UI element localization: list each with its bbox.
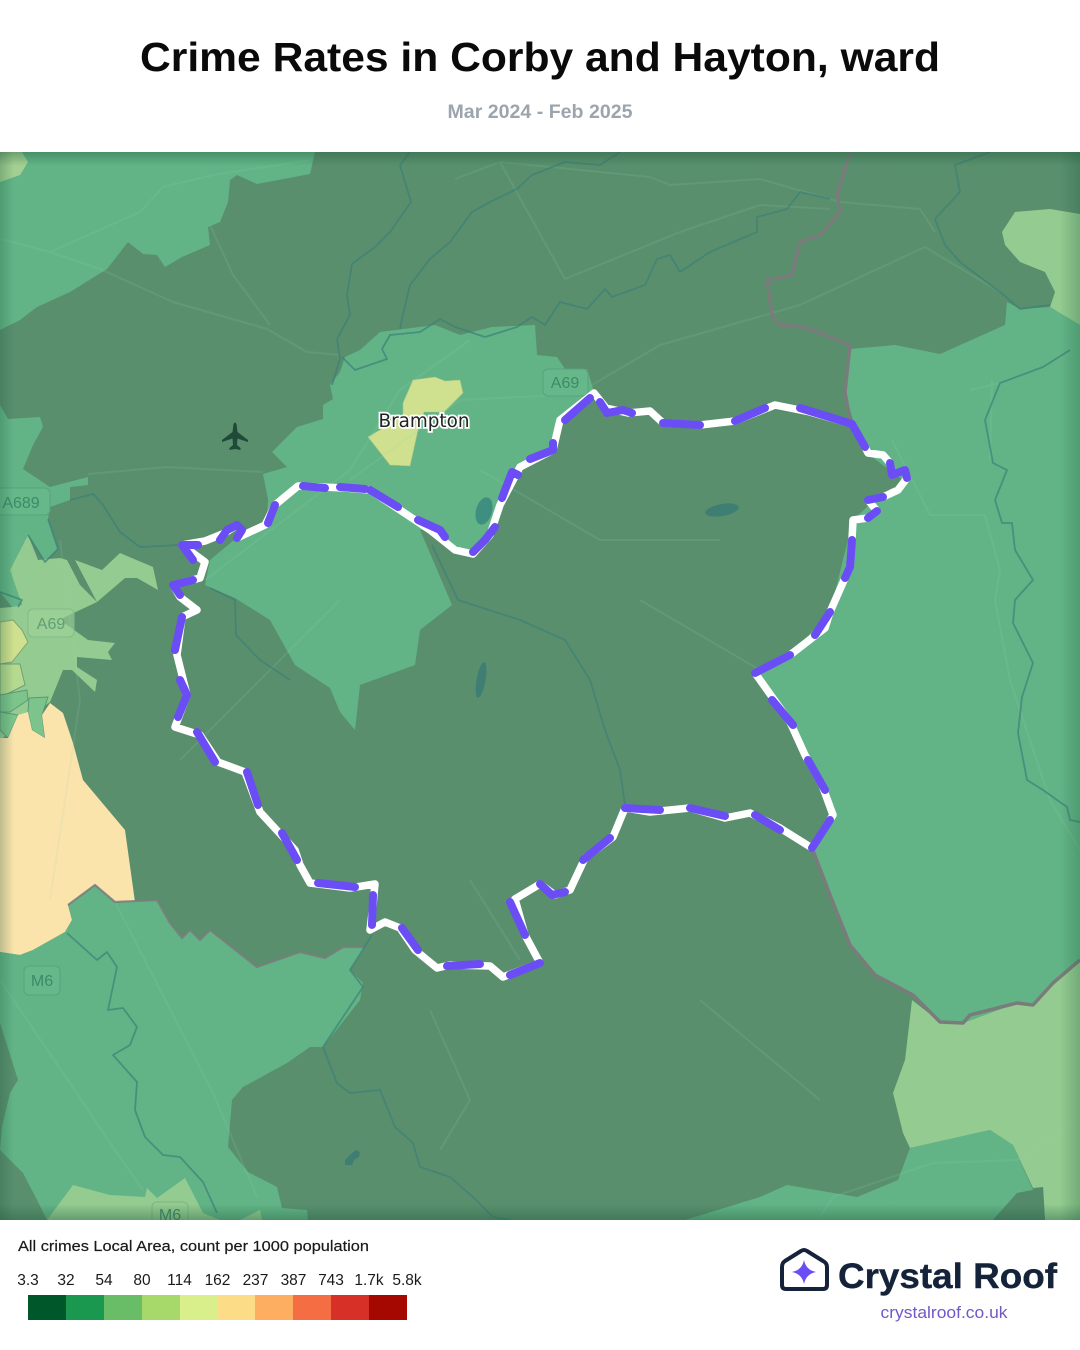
icon: house with star xyxy=(782,1250,827,1289)
region: south-east light xyxy=(893,960,1080,1220)
legend value labels: 387 xyxy=(281,1272,306,1289)
region: Carlisle pale-green ward xyxy=(0,664,25,695)
legend colour scale xyxy=(28,1295,407,1320)
roads xyxy=(49,163,996,1194)
map regions xyxy=(0,152,1080,1220)
region: west medium A689 xyxy=(0,405,88,607)
road label A689 xyxy=(0,488,50,515)
legend value labels: 3.3 xyxy=(17,1272,39,1289)
region: south light patch xyxy=(47,1178,262,1220)
map edge vignette xyxy=(0,152,1080,1220)
region: Brampton town pale xyxy=(368,377,463,466)
legend value labels: 114 xyxy=(167,1272,192,1289)
place label: Brampton: Brampton xyxy=(378,410,470,432)
region: Carlisle pale ward xyxy=(0,620,28,664)
region: Carlisle sand xyxy=(0,703,135,955)
region: top-left corner xyxy=(0,152,28,182)
website url: crystalroof.co.uk xyxy=(880,1304,1008,1322)
rivers xyxy=(0,152,1080,1220)
logo wordmark: Crystal Roof xyxy=(838,1257,1057,1296)
region: Carlisle light lobe xyxy=(75,553,158,602)
region: Carlisle green wards xyxy=(0,690,48,738)
legend value labels: 1.7k xyxy=(354,1272,384,1289)
logo: Crystal Roof xyxy=(782,1250,1057,1322)
subtitle: date range: Mar 2024 - Feb 2025 xyxy=(448,102,633,123)
region: Carlisle light green xyxy=(0,535,115,740)
boundary white line xyxy=(173,393,907,977)
admin boundaries xyxy=(68,152,1080,1023)
road label A69 west xyxy=(28,609,74,637)
region: Brampton surroundings medium xyxy=(205,325,594,730)
legend value labels: 743 xyxy=(318,1272,344,1289)
road label M6 south: M6 xyxy=(159,1207,181,1224)
legend value labels: 162 xyxy=(205,1272,230,1289)
road label M6 xyxy=(24,966,60,995)
region: north-east light xyxy=(1002,209,1080,325)
icon: airport plane xyxy=(222,422,248,450)
region: east medium xyxy=(755,302,1080,1023)
boundary purple dashes xyxy=(173,398,907,975)
road label M6: M6 xyxy=(31,973,53,990)
legend value labels xyxy=(17,1272,422,1289)
region: south-east dark notch xyxy=(997,1187,1045,1218)
region: north-west medium band xyxy=(0,152,315,330)
region: south-west medium xyxy=(0,885,365,1220)
road label A69 north: A69 xyxy=(551,375,579,392)
road label A69 west: A69 xyxy=(37,616,65,633)
region: south-east medium xyxy=(685,1130,1033,1220)
legend value labels: 54 xyxy=(95,1272,113,1289)
legend value labels: 32 xyxy=(57,1272,75,1289)
road label A69 north xyxy=(543,369,588,396)
legend title: All crimes Local Area, count per 1000 population xyxy=(18,1238,369,1255)
legend value labels: 237 xyxy=(243,1272,268,1289)
road label A689: A689 xyxy=(2,495,40,512)
road label M6 south xyxy=(152,1202,188,1220)
choropleth map xyxy=(0,152,1080,1231)
legend value labels: 80 xyxy=(133,1272,151,1289)
lakes xyxy=(345,495,740,1165)
legend xyxy=(17,1238,422,1320)
title: Crime Rates in Corby and Hayton, ward xyxy=(140,34,940,80)
ward boundary: Corby and Hayton xyxy=(173,393,907,977)
legend value labels: 5.8k xyxy=(392,1272,422,1289)
road shields xyxy=(0,369,588,1231)
